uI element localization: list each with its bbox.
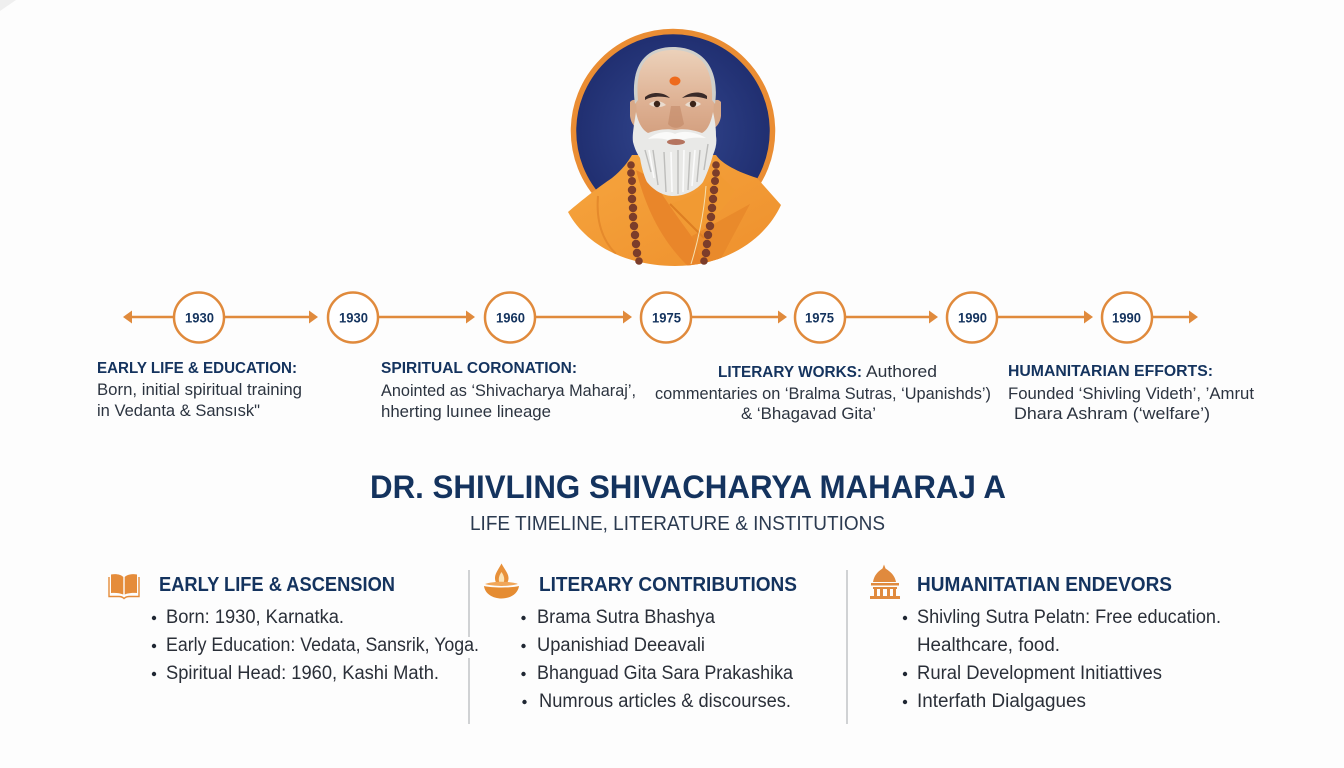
portrait: Dr. Shivling Shivacharya Maharaj: [560, 32, 790, 270]
heading: EARLY LIFE & ASCENSION: [159, 574, 395, 596]
year marker 1990 second: [1102, 292, 1152, 342]
icon: open book: [109, 574, 139, 598]
panel: humanitarian endeavors: [870, 564, 1221, 712]
timeline text: humanitarian efforts: Dhara Ashram (‘welfare’): [1014, 404, 1210, 423]
heading: LITERARY CONTRIBUTIONS: [539, 574, 797, 596]
bullet list: Born: 1930, Karnatka.: [166, 607, 344, 628]
timeline text: spiritual coronation: Anointed as ‘Shivacharya Maharaj’,: [381, 381, 636, 400]
year marker 1975 second: [795, 292, 845, 342]
timeline text: literary works: [655, 362, 991, 423]
bullet list: Spiritual Head: 1960, Kashi Math.: [166, 663, 439, 684]
bullet list: Interfath Dialgagues: [917, 691, 1086, 712]
timeline text: spiritual coronation: hherting luınee lineage: [381, 402, 551, 421]
panel: early life and ascension: [109, 574, 479, 684]
year marker 1930 second: [328, 292, 378, 342]
year marker 1975: 1975: [652, 310, 681, 326]
subtitle: LIFE TIMELINE, LITERATURE & INSTITUTIONS: [470, 512, 885, 535]
bullet list: [903, 607, 1221, 712]
timeline line and arrows: [123, 310, 1198, 324]
timeline text: spiritual coronation: SPIRITUAL CORONATION:: [381, 360, 577, 377]
timeline: [123, 292, 1198, 342]
timeline text: literary works: & ‘Bhagavad Gita’: [741, 404, 876, 423]
timeline text: early life: EARLY LIFE & EDUCATION:: [97, 360, 297, 377]
timeline text: humanitarian efforts: Founded ‘Shivling Videth’, ’Amrut: [1008, 384, 1254, 403]
year marker 1975 second: 1975: [805, 310, 834, 326]
bullet list: Brama Sutra Bhashya: [537, 607, 715, 628]
timeline text: humanitarian efforts: HUMANITARIAN EFFORTS:: [1008, 363, 1213, 380]
year marker 1960: [485, 292, 535, 342]
timeline text: literary works: LITERARY WORKS:: [718, 364, 862, 381]
timeline text: early life: Born, initial spiritual training: [97, 380, 302, 399]
timeline text: early life: in Vedanta & Sansısk": [97, 401, 260, 420]
bullet list: Numrous articles & discourses.: [539, 691, 791, 712]
timeline text: early life: [97, 360, 302, 420]
year marker 1990: 1990: [958, 310, 987, 326]
title: DR. SHIVLING SHIVACHARYA MAHARAJ A: [370, 469, 1006, 505]
bullet list: [152, 607, 479, 684]
heading: HUMANITATIAN ENDEVORS: [917, 574, 1172, 596]
beard: [633, 112, 716, 196]
icon: temple: [870, 564, 900, 599]
robe: [568, 155, 781, 266]
timeline text: literary works: Authored: [866, 362, 937, 381]
year marker 1990 second: 1990: [1112, 310, 1141, 326]
year marker 1930: [174, 292, 224, 342]
bullet list: Healthcare, food.: [917, 635, 1060, 656]
year marker 1930: 1930: [185, 310, 214, 326]
head: [630, 47, 721, 196]
portrait ring: [574, 32, 772, 230]
year marker 1990: [947, 292, 997, 342]
bullet list: Shivling Sutra Pelatn: Free education.: [917, 607, 1221, 628]
year marker 1975: [641, 292, 691, 342]
bullet list: Early Education: Vedata, Sansrik, Yoga.: [166, 635, 479, 656]
bullet list: Upanishiad Deeavali: [537, 635, 705, 656]
bindi: [670, 76, 680, 86]
bullet list: Bhanguad Gita Sara Prakashika: [537, 663, 793, 684]
year marker 1930 second: 1930: [339, 310, 368, 326]
timeline text: literary works: commentaries on ‘Bralma Sutras, ‘Upanishds’): [655, 384, 991, 403]
panel: literary contributions: [484, 564, 797, 712]
icon: oil lamp: [484, 564, 519, 598]
prayer beads: [627, 161, 720, 265]
timeline text: spiritual coronation: [381, 360, 636, 421]
timeline text: humanitarian efforts: [1008, 363, 1254, 423]
year marker 1960: 1960: [496, 310, 525, 326]
bullet list: [521, 607, 793, 712]
bullet list: Rural Development Initiattives: [917, 663, 1162, 684]
